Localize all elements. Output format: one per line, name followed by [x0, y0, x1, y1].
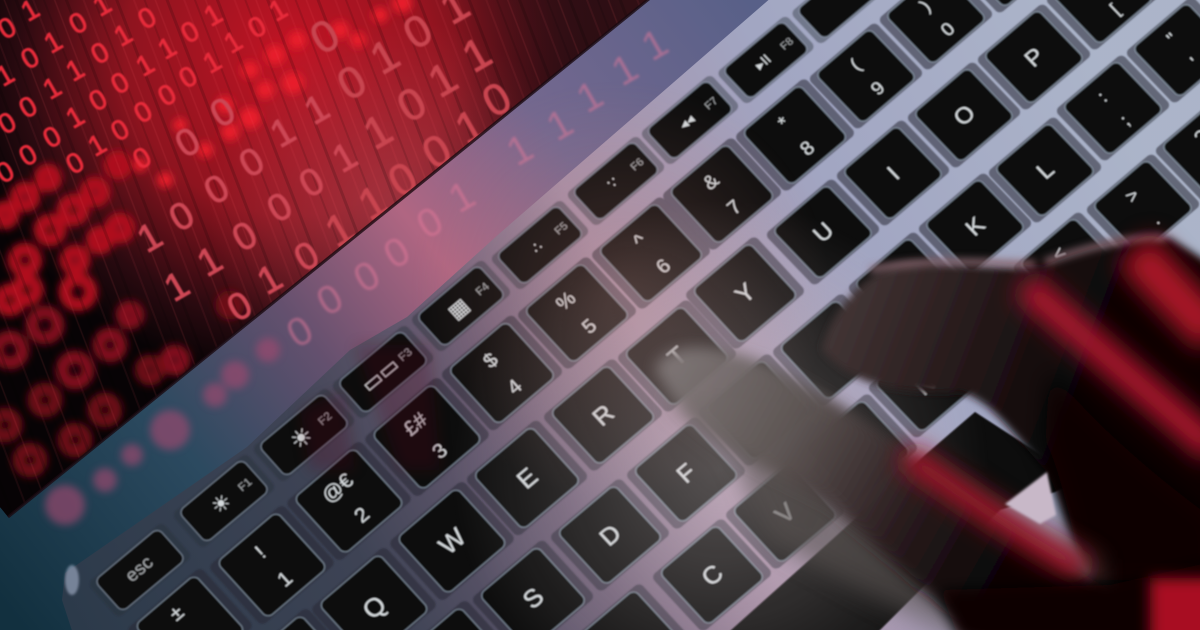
number key row: 6 — [652, 255, 675, 278]
QWERTY row: O — [949, 101, 981, 131]
ASDF row: L — [1032, 157, 1060, 184]
screen bezel edge line — [8, 0, 660, 517]
number key row: $ — [479, 349, 503, 373]
red reflection streaks on left keys — [300, 345, 440, 470]
binary digits: 1 — [355, 105, 401, 159]
number key row: 8 — [796, 137, 819, 160]
QWERTY row: P — [1020, 44, 1050, 72]
binary digits: 0 — [292, 160, 332, 206]
binary digits: 0 — [243, 10, 271, 44]
binary digits: 0 — [153, 78, 181, 112]
binary digits: 0 — [225, 214, 265, 260]
ASDF row: S — [518, 583, 550, 615]
lower finger red rim — [905, 455, 1085, 570]
bottom letter row — [569, 94, 1200, 630]
binary digits: 0 — [106, 66, 134, 100]
translucent lower part of finger — [665, 400, 1100, 630]
blurred bright red digits top centre — [133, 0, 412, 188]
ASDF row — [391, 0, 1200, 630]
QWERTY row: R — [587, 400, 620, 432]
bottom letter row: < — [1048, 242, 1070, 265]
binary digits: 1 — [263, 110, 303, 156]
number key row: 7 — [723, 196, 746, 219]
bottom letter row: C — [696, 560, 729, 592]
number key row: * — [774, 113, 795, 134]
QWERTY row: E — [512, 463, 544, 495]
binary digits: 1 — [198, 45, 226, 79]
digit reflections on hinge band: 0 — [376, 228, 418, 278]
bottom letter row: V — [770, 498, 802, 529]
number key row: 4 — [503, 376, 527, 399]
binary digits: 0 — [14, 90, 42, 124]
binary digits: 1 — [350, 176, 396, 230]
blurred reflection blobs — [45, 338, 280, 525]
number key row: ( — [845, 55, 865, 74]
number key row: @€ — [317, 469, 358, 508]
QWERTY row — [232, 0, 1161, 630]
binary digits: 1 — [61, 53, 89, 87]
binary digits: 1 — [109, 18, 137, 52]
binary digits: 0 — [474, 73, 520, 127]
digit reflections on hinge band: 1 — [539, 100, 581, 150]
digit reflections on hinge band: 0 — [409, 198, 451, 248]
binary digits: 0 — [64, 6, 92, 40]
ASDF row: : — [1093, 87, 1111, 106]
binary digits: 1 — [362, 30, 408, 84]
laptop screen with red binary code — [0, 0, 700, 530]
binary digits: 0 — [203, 90, 243, 136]
QWERTY row: [ — [1105, 0, 1124, 18]
blurred red rings lower left — [0, 157, 238, 471]
binary digits: 1 — [297, 87, 337, 133]
binary digits: 1 — [325, 135, 365, 181]
bottom letter row: N — [910, 371, 941, 401]
red light on second finger — [1135, 250, 1200, 335]
QWERTY row: Y — [730, 278, 762, 309]
number key row: 1 — [273, 567, 297, 591]
bottom letter row: > — [1121, 184, 1143, 207]
binary digits: 0 — [176, 15, 204, 49]
function key row: ▦ — [443, 294, 474, 324]
number key row: 9 — [866, 77, 889, 99]
binary digits: 0 — [16, 41, 44, 75]
number key row: & — [699, 170, 724, 195]
binary digits: 0 — [197, 167, 237, 213]
upper fingers and palm — [822, 237, 1200, 630]
binary digits: 0 — [174, 60, 202, 94]
binary digits: 1 — [420, 53, 466, 107]
space bar — [720, 412, 1080, 630]
number key row: ! — [251, 542, 270, 563]
binary digits: 1 — [250, 257, 290, 303]
hand — [655, 237, 1200, 630]
digit reflections on hinge band: 0 — [309, 275, 351, 325]
binary digits: 0 — [232, 140, 272, 186]
binary digits: 1 — [157, 264, 197, 310]
binary digits: 0 — [287, 234, 327, 280]
digit reflections on hinge band: 1 — [499, 125, 541, 175]
digit reflections on hinge band: 1 — [634, 20, 676, 70]
ASDF row: D — [594, 520, 627, 552]
binary digits: 0 — [38, 120, 66, 154]
binary digits: 1 — [190, 239, 230, 285]
function key row: F5 — [552, 220, 570, 237]
number key row — [126, 0, 1066, 630]
binary digits: 0 — [86, 36, 114, 70]
binary digits: 1 — [83, 128, 111, 162]
number key row: % — [552, 288, 580, 315]
binary digits: 1 — [61, 100, 89, 134]
red rim light on knuckle — [1025, 285, 1200, 450]
function key row: F1 — [236, 476, 255, 494]
binary digits: 0 — [84, 83, 112, 117]
number key row: ± — [164, 601, 189, 625]
number key row: 0 — [936, 18, 959, 40]
QWERTY row: U — [808, 218, 839, 248]
number key row: 2 — [350, 503, 374, 527]
binary digits: 0 — [414, 125, 460, 179]
QWERTY row: W — [433, 522, 472, 560]
binary digits: 1 — [153, 31, 181, 65]
digit reflections on hinge band: 1 — [441, 172, 483, 222]
function key row: ∴ — [528, 239, 546, 257]
function key row: F6 — [628, 156, 646, 173]
binary digits: 0 — [380, 153, 426, 207]
binary digits: 1 — [454, 28, 500, 82]
function key row: esc — [121, 552, 157, 586]
binary digits: 0 — [61, 146, 89, 180]
dark lower hand — [940, 560, 1200, 630]
deck corner highlight — [65, 565, 79, 595]
QWERTY row: I — [883, 163, 905, 185]
number key row: 5 — [578, 315, 601, 338]
ASDF row: F — [671, 458, 702, 489]
function key row: F8 — [778, 36, 796, 52]
function key row: F2 — [316, 410, 335, 428]
lower finger — [655, 347, 1110, 630]
ASDF row: K — [961, 212, 991, 241]
binary digits: 0 — [168, 120, 208, 166]
ASDF row: ; — [1115, 111, 1134, 129]
light wedge between fingers — [1005, 472, 1056, 524]
number key row: ^ — [629, 230, 652, 252]
binary digits: 0 — [128, 141, 156, 175]
function key row: F4 — [474, 281, 492, 298]
binary digits: 1 — [317, 203, 363, 257]
binary digits — [0, 0, 520, 330]
binary digits: 0 — [302, 10, 348, 64]
bottom letter row: . — [1145, 210, 1164, 228]
function key row: ☀ — [206, 489, 237, 519]
digit reflections on hinge band — [279, 20, 676, 357]
digit reflections on hinge band: 0 — [279, 307, 321, 357]
binary digits: 1 — [38, 71, 66, 105]
binary digits: 0 — [329, 56, 375, 110]
binary digits: 0 — [129, 95, 157, 129]
function key row — [87, 0, 890, 618]
digit reflections on hinge band: 1 — [569, 72, 611, 122]
function key row: ∵ — [604, 175, 622, 193]
function key row: ☀ — [285, 422, 320, 456]
QWERTY row: T — [662, 341, 693, 372]
bottom right red glow — [1150, 578, 1200, 630]
binary digits: 0 — [133, 1, 161, 35]
function key row: F3 — [396, 346, 415, 364]
function key row: ▭▭ — [357, 353, 404, 397]
binary digits: 1 — [130, 215, 170, 261]
binary digits: 0 — [162, 194, 202, 240]
function key row: ◂◂ — [676, 112, 699, 133]
number key row: £# — [399, 408, 432, 440]
function key row: F7 — [702, 95, 720, 112]
digit reflections on hinge band: 0 — [346, 252, 388, 302]
binary digits: 0 — [14, 138, 42, 172]
binary digits: 0 — [106, 113, 134, 147]
ASDF row: " — [1162, 29, 1182, 48]
digit reflections on hinge band: 1 — [604, 45, 646, 95]
binary digits: 1 — [219, 25, 247, 59]
binary digits: 0 — [389, 78, 435, 132]
black palm shadow — [1045, 370, 1200, 580]
binary digits: 0 — [220, 284, 260, 330]
binary digits: 1 — [447, 100, 493, 154]
number key row: 3 — [428, 439, 452, 463]
function key row: ▸II — [752, 52, 775, 73]
binary digits: 0 — [395, 5, 441, 59]
lit upper finger edge — [870, 238, 1165, 270]
binary digits: 0 — [260, 185, 300, 231]
binary digits: 1 — [39, 25, 67, 59]
screen streaks — [0, 0, 670, 530]
binary digits: 1 — [131, 48, 159, 82]
QWERTY row: Q — [356, 590, 392, 625]
